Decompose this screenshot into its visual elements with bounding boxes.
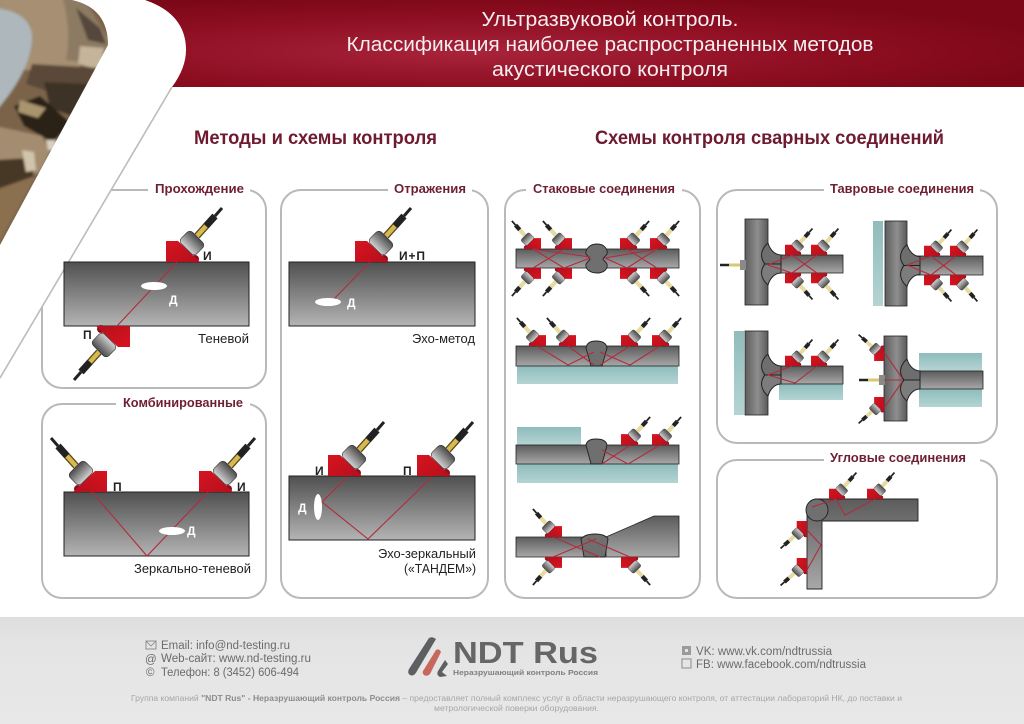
diagram: Эхо-зеркальный ТАНДЕМ: Д	[298, 501, 307, 515]
T-joint 2	[873, 221, 983, 306]
contacts left: Телефон: 8 (3452) 606-494	[161, 667, 300, 679]
contacts left: @	[145, 654, 157, 666]
diagram: Эхо-метод: Эхо-метод	[412, 332, 476, 346]
diagram: Теневой: П	[83, 328, 92, 342]
diagram: Эхо-метод	[289, 208, 476, 346]
diagram: Теневой: И	[203, 249, 212, 263]
corner joint	[781, 473, 918, 589]
contacts right	[682, 646, 867, 671]
panel: Стаковые соединения: Стаковые соединения	[533, 182, 675, 196]
title: Ультразвуковой контроль.	[482, 9, 738, 31]
diagram: Эхо-метод: Д	[347, 296, 356, 310]
diagram: Зеркально-теневой: Д	[187, 524, 196, 538]
diagram: Эхо-зеркальный ТАНДЕМ	[289, 422, 476, 576]
panel: Угловые соединения: Угловые соединения	[830, 451, 966, 465]
diagram: Теневой	[64, 208, 249, 380]
panel: Тавровые соединения: Тавровые соединения	[830, 182, 974, 196]
diagonal line	[0, 87, 172, 378]
diagram: Эхо-зеркальный ТАНДЕМ: П	[403, 464, 412, 478]
diagram: Зеркально-теневой: И	[237, 480, 246, 494]
butt joint 4 thickness transition	[516, 509, 679, 585]
panel: Отражения: Отражения	[394, 182, 466, 196]
title	[346, 9, 874, 81]
diagram: Теневой: Д	[169, 293, 178, 307]
butt joint 2 with backing	[516, 318, 681, 384]
panel: Комбинированные	[42, 394, 266, 598]
panel: Отражения	[281, 180, 488, 598]
panel: Прохождение	[42, 180, 266, 388]
heading: Схемы контроля сварных соединений: Схемы контроля сварных соединений	[595, 128, 944, 149]
contacts left	[145, 640, 311, 679]
diagram: Зеркально-теневой	[51, 438, 255, 576]
heading: Методы и схемы контроля: Методы и схемы контроля	[194, 128, 437, 149]
photo: industrial equipment	[0, 0, 115, 255]
panel: Стаковые соединения	[505, 180, 700, 598]
T-joint 4	[859, 335, 983, 423]
diagram: Эхо-зеркальный ТАНДЕМ: И	[315, 464, 324, 478]
diagram: Эхо-зеркальный ТАНДЕМ: («ТАНДЕМ»)	[404, 562, 476, 576]
T-joint 1	[720, 219, 843, 305]
panel title: Прохождение: Прохождение	[155, 182, 244, 196]
butt joint 1	[512, 221, 679, 296]
footer description	[131, 694, 902, 713]
logo: NDT Rus: Неразрушающий контроль Россия	[453, 668, 598, 677]
diagram: Эхо-метод: И+П	[399, 249, 425, 263]
white diagonal band	[0, 0, 186, 378]
diagram: Эхо-зеркальный ТАНДЕМ: Эхо-зеркальный	[378, 547, 476, 561]
logo: NDT Rus	[408, 635, 598, 677]
contacts left: Email: info@nd-testing.ru	[161, 640, 290, 652]
panel: Тавровые соединения	[717, 180, 997, 443]
footer band	[0, 617, 1024, 724]
diagram: Зеркально-теневой: Зеркально-теневой	[134, 562, 251, 576]
contacts left: Web-сайт: www.nd-testing.ru	[161, 653, 311, 665]
title: Классификация наиболее распространенных методов	[346, 34, 874, 56]
contacts left: ©	[146, 667, 155, 679]
logo: NDT Rus: NDT Rus	[453, 635, 598, 670]
diagram: Теневой: Теневой	[198, 332, 249, 346]
footer description: метрологической поверки оборудования.	[434, 704, 599, 713]
panel: Угловые соединения	[717, 450, 997, 598]
contacts right: VK: www.vk.com/ndtrussia	[696, 646, 833, 658]
butt joint 3 with stiffener	[516, 417, 681, 483]
T-joint 3	[734, 331, 843, 415]
panel: Комбинированные: Комбинированные	[123, 396, 243, 410]
title: акустического контроля	[492, 59, 728, 81]
footer description: Группа компаний "NDT Rus" - Неразрушающий контроль Россия – предоставляет полный комплекс услуг в области неразрушающего контроля, от аттестации лабораторий НК, до поставки и	[131, 694, 902, 703]
diagram: Зеркально-теневой: П	[113, 480, 122, 494]
contacts right: FB: www.facebook.com/ndtrussia	[696, 659, 867, 671]
header band	[100, 0, 1024, 87]
